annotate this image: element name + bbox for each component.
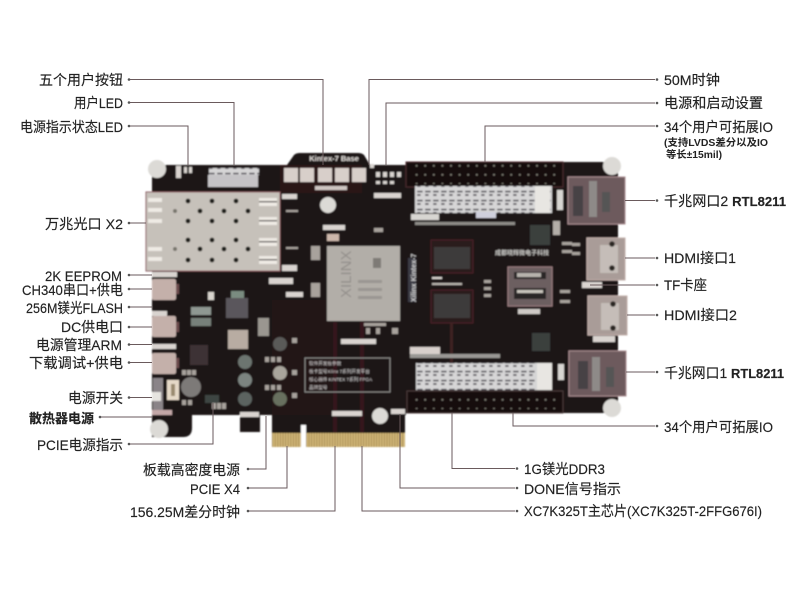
- callout: 50M时钟: [369, 72, 720, 165]
- callout: CH340串口+供电: CH340串口+供电: [22, 282, 123, 298]
- info box: 核心器件 KINTEX 7系列 FPGA: [309, 376, 373, 383]
- vertical board name: [408, 254, 418, 302]
- callout: 156.25M差分时钟: [130, 446, 335, 520]
- callout: 34个用户可拓展IO (top): (支持LVDS差分以及IO: [664, 136, 768, 149]
- PHY chips: [530, 221, 560, 351]
- callout: 电源开关: 电源开关: [68, 390, 123, 406]
- callout: HDMI接口2: [627, 307, 737, 323]
- board title tab: Kintex-7 Base: [309, 154, 359, 163]
- power switch: [152, 378, 179, 415]
- HDMI connector 1: [587, 238, 625, 280]
- callout: 五个用户按钮: [39, 72, 323, 165]
- callout: 板载高密度电源: [143, 416, 266, 478]
- RJ45 network port 2: [568, 177, 625, 224]
- callout: 2K EEPROM: 2K EEPROM: [45, 268, 122, 284]
- callout: XC7K325T主芯片: [362, 446, 762, 519]
- passives right area: [484, 242, 580, 303]
- company silk text: 成都晓辉微电子科技: [495, 249, 549, 257]
- callout: TF卡座: TF卡座: [664, 277, 707, 293]
- callout: DONE信号指示: DONE信号指示: [524, 481, 621, 497]
- user buttons: [284, 168, 366, 190]
- vertical board name: Xilinx Kintex-7: [411, 254, 418, 302]
- callout: DC供电口: [61, 319, 152, 335]
- callout: 用户LED: [74, 95, 234, 165]
- DDR3 memory chips: [431, 240, 473, 323]
- callout: 散热器电源: 散热器电源: [29, 411, 94, 426]
- PCIe gold fingers: [272, 425, 405, 448]
- callout: HDMI接口2: HDMI接口2: [664, 307, 737, 323]
- info box: 板卡型号Xilinx 7系列开发平台: [309, 368, 370, 375]
- callout: 板载高密度电源: 板载高密度电源: [143, 462, 240, 478]
- callout: 电源和启动设置: 电源和启动设置: [664, 95, 763, 111]
- callout: 万兆光口 X2: 万兆光口 X2: [45, 216, 123, 232]
- USB-C and DC connectors: [152, 279, 179, 374]
- callout: 千兆网口2 RTL8211: 千兆网口2 RTL8211: [664, 193, 786, 209]
- callout: 156.25M差分时钟: 156.25M差分时钟: [130, 504, 240, 520]
- HDMI connector 2: [588, 296, 627, 335]
- TF card slot: [508, 267, 552, 314]
- callout: 电源开关: [68, 390, 152, 406]
- callout: TF卡座: [590, 277, 707, 293]
- SFP optical cage X2: [146, 192, 280, 271]
- callout: 34个用户可拓展IO (top): [485, 119, 773, 162]
- callout: 34个用户可拓展IO (bottom): 34个用户可拓展IO: [664, 419, 773, 435]
- status LEDs: [176, 166, 192, 178]
- callout: 256M镁光FLASH: 256M镁光FLASH: [26, 300, 123, 316]
- callout: PCIE X4: [190, 446, 287, 497]
- info box: 品牌型号: [309, 384, 328, 391]
- callout: 电源指示状态LED: [20, 119, 188, 165]
- FPGA main chip: [327, 246, 400, 321]
- callout: 50M时钟: 50M时钟: [664, 72, 720, 88]
- chips and passives near FPGA: [286, 210, 398, 334]
- power inductors and regulators: [181, 291, 297, 409]
- callout: 用户LED: 用户LED: [74, 95, 123, 111]
- callout: DC供电口: DC供电口: [61, 319, 123, 335]
- callout: PCIE X4: PCIE X4: [190, 481, 240, 497]
- callout: PCIE电源指示: PCIE电源指示: [37, 437, 123, 453]
- callout: 1G镁光DDR3: [452, 413, 605, 477]
- callout: 千兆网口1 RTL8211: 千兆网口1 RTL8211: [664, 365, 784, 381]
- bottom expansion header: [407, 347, 564, 413]
- callout: 散热器电源: [29, 411, 152, 426]
- callout: XC7K325T主芯片: XC7K325T主芯片(XC7K325T-2FFG676I): [524, 503, 762, 519]
- callout: 电源指示状态LED: 电源指示状态LED: [20, 119, 123, 135]
- clock and power settings: [370, 164, 401, 198]
- info box: 软件开发板参数: [309, 360, 342, 367]
- callout: 下载调试+供电: 下载调试+供电: [29, 355, 123, 371]
- callout: 电源管理ARM: 电源管理ARM: [36, 337, 122, 353]
- callout: 34个用户可拓展IO (bottom): [513, 413, 773, 435]
- callout: HDMI接口1: HDMI接口1: [664, 250, 736, 266]
- callout: 1G镁光DDR3: 1G镁光DDR3: [524, 461, 605, 477]
- top expansion header: [406, 162, 563, 225]
- callout: PCIE电源指示: [37, 403, 213, 453]
- RJ45 network port 1: [569, 351, 626, 396]
- FPGA main chip: XILINX: [338, 250, 355, 298]
- callout: HDMI接口1: [625, 250, 736, 266]
- small silk labels: [152, 194, 615, 417]
- info box: [305, 358, 390, 392]
- callout: 电源和启动设置: [386, 95, 763, 165]
- callout: 34个用户可拓展IO (top): 34个用户可拓展IO: [664, 119, 773, 135]
- user LEDs: [208, 168, 259, 187]
- callout: DONE信号指示: [400, 414, 621, 497]
- PCB outline: [152, 153, 618, 437]
- board: FPGA development board: [146, 153, 627, 448]
- callout: 34个用户可拓展IO (top): 等长±15mil): [666, 148, 722, 161]
- callout: 五个用户按钮: 五个用户按钮: [39, 72, 123, 88]
- standoffs: [148, 157, 621, 438]
